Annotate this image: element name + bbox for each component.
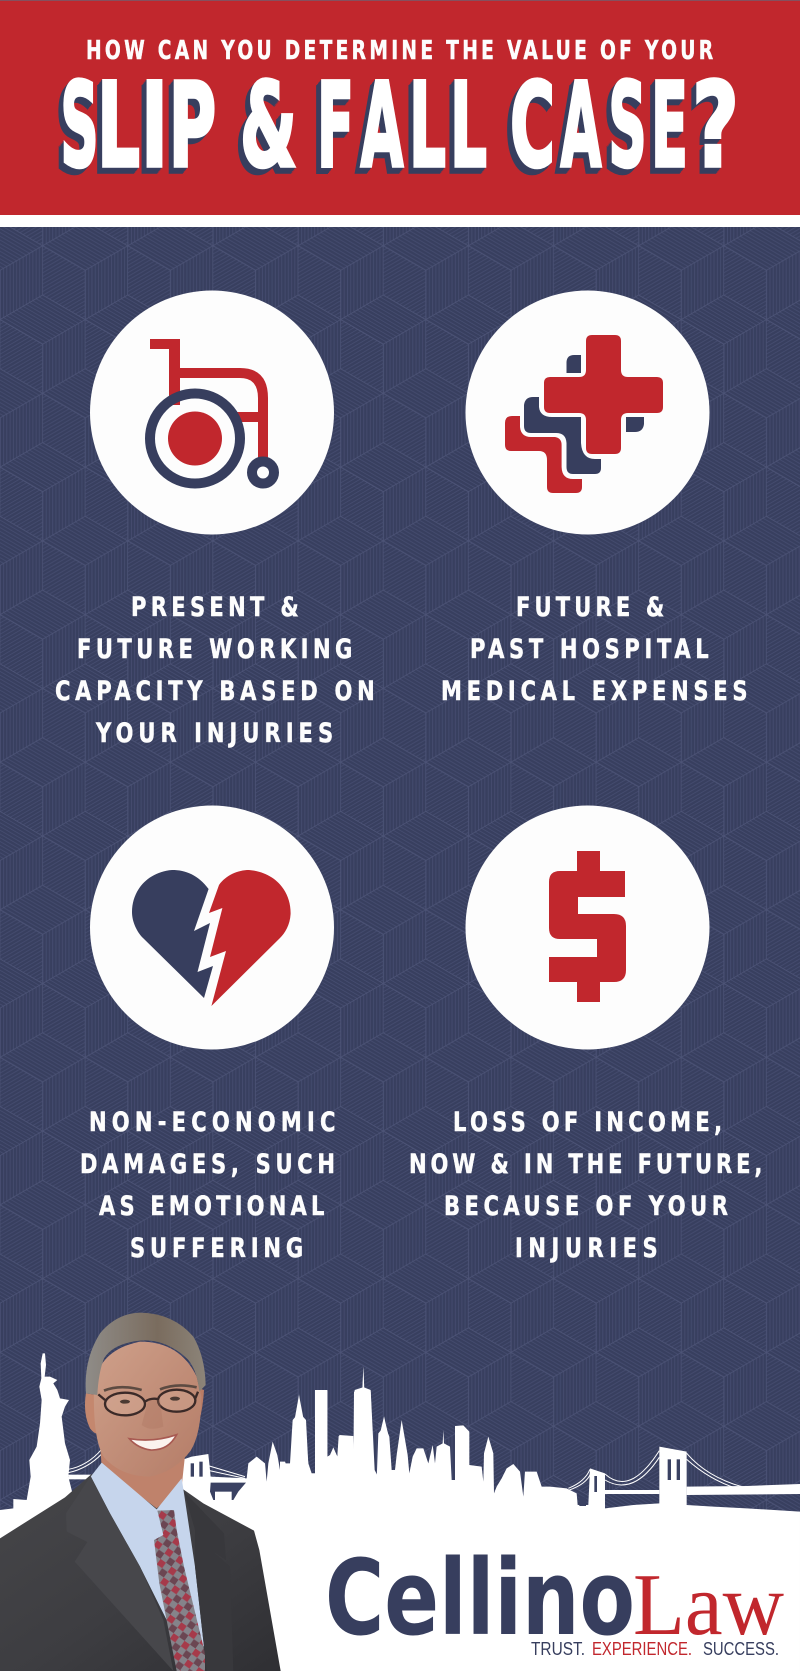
text: non-economic damages: NON-ECONOMIC	[89, 1106, 335, 1138]
text: non-economic damages: AS EMOTIONAL	[99, 1190, 324, 1222]
text: loss of income: BECAUSE OF YOUR	[444, 1190, 728, 1222]
wordmark Cellino: Cellino	[325, 1537, 635, 1659]
icon: broken heart	[90, 806, 334, 1050]
glasses	[98, 1390, 198, 1415]
title with navy extrusion: S	[60, 57, 99, 194]
text: non-economic damages: DAMAGES, SUCH	[80, 1148, 335, 1180]
title with navy extrusion: E	[651, 57, 688, 194]
text: hospital expenses: PAST HOSPITAL	[470, 633, 709, 665]
right lapel	[184, 1492, 233, 1671]
subtitle: HOW CAN YOU DETERMINE THE VALUE OF YOUR	[86, 36, 713, 66]
tie	[154, 1510, 205, 1671]
text: hospital expenses	[441, 591, 748, 707]
text: working capacity: PRESENT &	[131, 591, 299, 623]
text: working capacity: FUTURE WORKING	[77, 633, 352, 665]
title with navy extrusion: L	[409, 57, 446, 194]
text: working capacity: YOUR INJURIES	[95, 717, 333, 749]
title with navy extrusion: &	[240, 57, 297, 194]
skyline: statue of liberty and bridge	[0, 1353, 400, 1671]
wordmark Law: Law	[633, 1557, 784, 1654]
eyes	[120, 1397, 180, 1404]
title with navy extrusion: I	[141, 57, 168, 194]
text: loss of income: LOSS OF INCOME,	[453, 1106, 722, 1138]
icon: wheelchair	[90, 290, 334, 534]
photo: attorney in suit	[0, 1313, 281, 1671]
title with navy extrusion: A	[560, 57, 602, 194]
text: loss of income: INJURIES	[515, 1232, 658, 1264]
title with navy extrusion: F	[317, 57, 354, 194]
left lapel	[66, 1476, 173, 1671]
tagline: SUCCESS.	[703, 1639, 779, 1659]
logo: Cellino Law	[325, 1537, 784, 1659]
title with navy extrusion: L	[97, 57, 140, 194]
tagline: TRUST.	[531, 1639, 585, 1659]
neck	[100, 1440, 187, 1508]
text: hospital expenses: FUTURE &	[516, 591, 664, 623]
nose shadow	[142, 1400, 163, 1429]
text: non-economic damages	[80, 1106, 335, 1264]
skyline: manhattan and brooklyn bridge	[280, 1367, 800, 1671]
text: non-economic damages: SUFFERING	[130, 1232, 303, 1264]
title with navy extrusion: S	[608, 57, 647, 194]
title with navy extrusion: P	[169, 57, 216, 194]
head: ears, face, hair	[85, 1313, 206, 1477]
title with navy extrusion	[60, 57, 739, 194]
text: working capacity: CAPACITY BASED ON	[55, 675, 375, 707]
tagline	[531, 1639, 779, 1659]
text: loss of income: NOW & IN THE FUTURE,	[409, 1148, 762, 1180]
text: loss of income	[409, 1106, 762, 1264]
smile	[129, 1435, 177, 1450]
suit jacket	[0, 1474, 281, 1671]
title with navy extrusion: A	[360, 57, 404, 194]
text: working capacity	[55, 591, 375, 749]
title with navy extrusion: L	[450, 57, 487, 194]
shirt	[91, 1463, 204, 1647]
title with navy extrusion: ?	[692, 57, 739, 194]
title with navy extrusion: C	[510, 57, 555, 194]
panel: red header	[0, 0, 800, 215]
text: hospital expenses: MEDICAL EXPENSES	[441, 675, 748, 707]
icon: medical crosses	[466, 290, 710, 534]
tagline: EXPERIENCE.	[592, 1639, 692, 1659]
icon: dollar sign	[466, 806, 710, 1050]
